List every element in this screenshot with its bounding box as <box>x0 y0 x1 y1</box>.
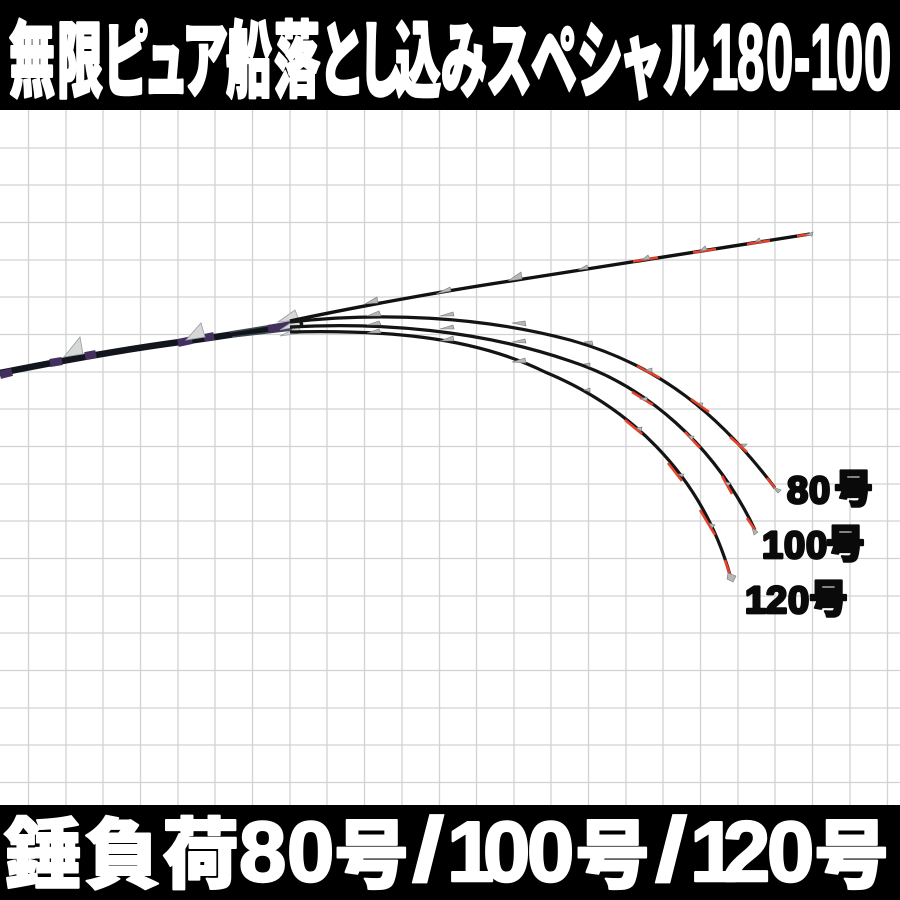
bottom text: 80 <box>239 805 334 900</box>
rod: unloaded tip <box>290 232 813 321</box>
icon: 100号 guides <box>367 321 758 535</box>
label: 80号: 号 <box>834 469 873 512</box>
label: 80号 <box>787 469 873 512</box>
rod: 120号 curve <box>290 329 736 582</box>
label: 100号 <box>762 524 865 567</box>
label: 120号 <box>745 579 848 622</box>
bottom text: / <box>654 799 688 900</box>
rod: 80号 curve <box>290 311 781 493</box>
bottom text: 号 <box>334 814 409 898</box>
bottom text: 120 <box>690 805 814 900</box>
label: 100号: 100 <box>762 525 827 567</box>
icon: tip guides <box>365 232 813 304</box>
title banner <box>0 0 900 110</box>
bottom text <box>4 799 889 900</box>
icon: butt guides <box>64 310 302 357</box>
label: 120号: 号 <box>809 579 848 622</box>
title text: 180-100 <box>711 5 891 109</box>
title text: 無限ピュア船落とし込みスペシャル <box>9 16 709 109</box>
bottom text: 100 <box>447 805 574 900</box>
label: 100号: 号 <box>826 524 865 567</box>
grid background <box>0 110 900 805</box>
bottom text: 号 <box>814 814 889 898</box>
rod: 100号 curve <box>290 321 758 535</box>
bottom text: / <box>411 799 445 900</box>
label: 120号: 120 <box>745 580 809 622</box>
label: 80号: 80 <box>787 470 830 512</box>
icon: 120号 guides <box>367 329 736 582</box>
icon: 80号 guides <box>367 311 781 493</box>
rod: butt section <box>0 310 302 375</box>
bottom banner <box>0 799 900 900</box>
bottom text: 錘負荷 <box>4 813 239 899</box>
bottom text: 号 <box>575 814 650 898</box>
